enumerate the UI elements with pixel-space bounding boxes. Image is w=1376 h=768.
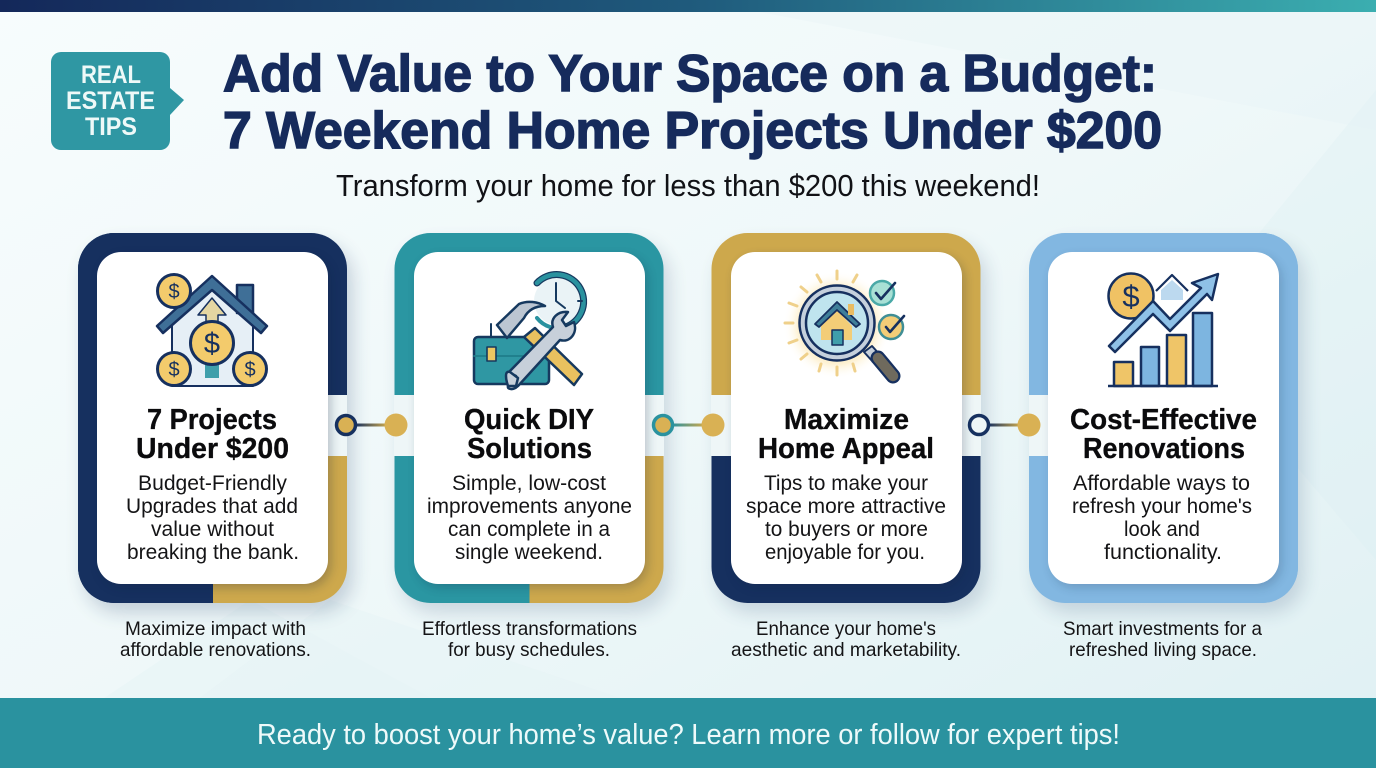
- caption 4: [1063, 618, 1262, 661]
- title: [223, 45, 1162, 160]
- body text: [746, 471, 946, 564]
- card frame gold and navy: [712, 233, 980, 603]
- caption 1: affordable renovations.: [120, 639, 311, 661]
- card frame teal and gold: [394, 233, 664, 603]
- body text: refresh your home's: [1072, 494, 1252, 518]
- body text: value without: [151, 517, 274, 541]
- badge: real estate tips: REAL: [81, 61, 141, 89]
- heading: Renovations: [1083, 433, 1245, 465]
- body text: breaking the bank.: [127, 540, 299, 564]
- badge: real estate tips: [51, 52, 184, 150]
- caption 2: Effortless transformations: [422, 618, 637, 640]
- icon: house with coins: $: [168, 359, 180, 381]
- body text: look and: [1124, 517, 1200, 541]
- card frame light blue: [1029, 233, 1298, 603]
- icon: house with coins: [157, 274, 267, 386]
- body text: Budget-Friendly: [138, 471, 287, 495]
- title: 7 Weekend Home Projects Under $200: [223, 102, 1162, 160]
- icon: growth chart with coin and house: $: [1122, 279, 1140, 314]
- body text: enjoyable for you.: [765, 540, 925, 564]
- connector: card 2 to card 3: [654, 414, 724, 436]
- caption 3: Enhance your home's: [756, 618, 936, 640]
- caption 2: for busy schedules.: [448, 639, 610, 661]
- body text: [126, 471, 299, 564]
- heading: 7 Projects: [147, 404, 277, 436]
- caption 4: Smart investments for a: [1063, 618, 1262, 640]
- body text: single weekend.: [455, 540, 603, 564]
- heading: Cost-Effective: [1070, 404, 1257, 436]
- subtitle: Transform your home for less than $200 this weekend!: [336, 168, 1040, 203]
- caption 3: [731, 618, 961, 661]
- connector: card 1 to card 2: [336, 414, 408, 436]
- badge: real estate tips: TIPS: [85, 113, 137, 141]
- connector: card 3 to card 4: [970, 414, 1040, 436]
- caption 1: [120, 618, 311, 661]
- panel: maximize home appeal: [711, 233, 987, 613]
- heading: [136, 404, 289, 465]
- heading: [464, 404, 594, 465]
- icon: growth chart with coin and house: [1108, 274, 1218, 386]
- heading: Maximize: [784, 404, 909, 436]
- body text: [1072, 471, 1252, 564]
- heading: [1070, 404, 1257, 465]
- footer banner: Ready to boost your home’s value? Learn more or follow for expert tips!: [257, 719, 1120, 751]
- panel: 7 projects under $200: [78, 233, 353, 613]
- heading: Quick DIY: [464, 404, 594, 436]
- body text: space more attractive: [746, 494, 946, 518]
- footer banner: [0, 698, 1376, 768]
- body text: Simple, low-cost: [452, 471, 606, 495]
- icon: magnifier over house: [783, 271, 904, 379]
- icon: toolbox, clock, hammer and wrench: [474, 275, 584, 389]
- panel: quick DIY solutions: [394, 233, 670, 613]
- icon: house with coins: $: [244, 359, 256, 381]
- body text: Affordable ways to: [1073, 471, 1250, 495]
- heading: Under $200: [136, 433, 289, 465]
- body text: Tips to make your: [764, 471, 928, 495]
- body text: [427, 471, 632, 564]
- body text: Upgrades that add: [126, 494, 298, 518]
- caption 1: Maximize impact with: [125, 618, 306, 640]
- caption 3: aesthetic and marketability.: [731, 639, 961, 661]
- caption 2: [422, 618, 637, 661]
- heading: Solutions: [467, 433, 592, 465]
- top gradient bar: [0, 0, 1376, 12]
- body text: improvements anyone: [427, 494, 632, 518]
- icon: house with coins: $: [168, 281, 180, 303]
- card frame navy and gold: [78, 233, 347, 603]
- body text: functionality.: [1104, 540, 1222, 564]
- title: Add Value to Your Space on a Budget:: [223, 45, 1157, 103]
- body text: to buyers or more: [765, 517, 928, 541]
- caption 4: refreshed living space.: [1069, 639, 1257, 661]
- heading: Home Appeal: [758, 433, 934, 465]
- icon: house with coins: $: [204, 328, 220, 360]
- heading: [758, 404, 934, 465]
- panel: cost-effective renovations: [1029, 233, 1304, 613]
- body text: can complete in a: [448, 517, 610, 541]
- badge: real estate tips: ESTATE: [66, 87, 155, 115]
